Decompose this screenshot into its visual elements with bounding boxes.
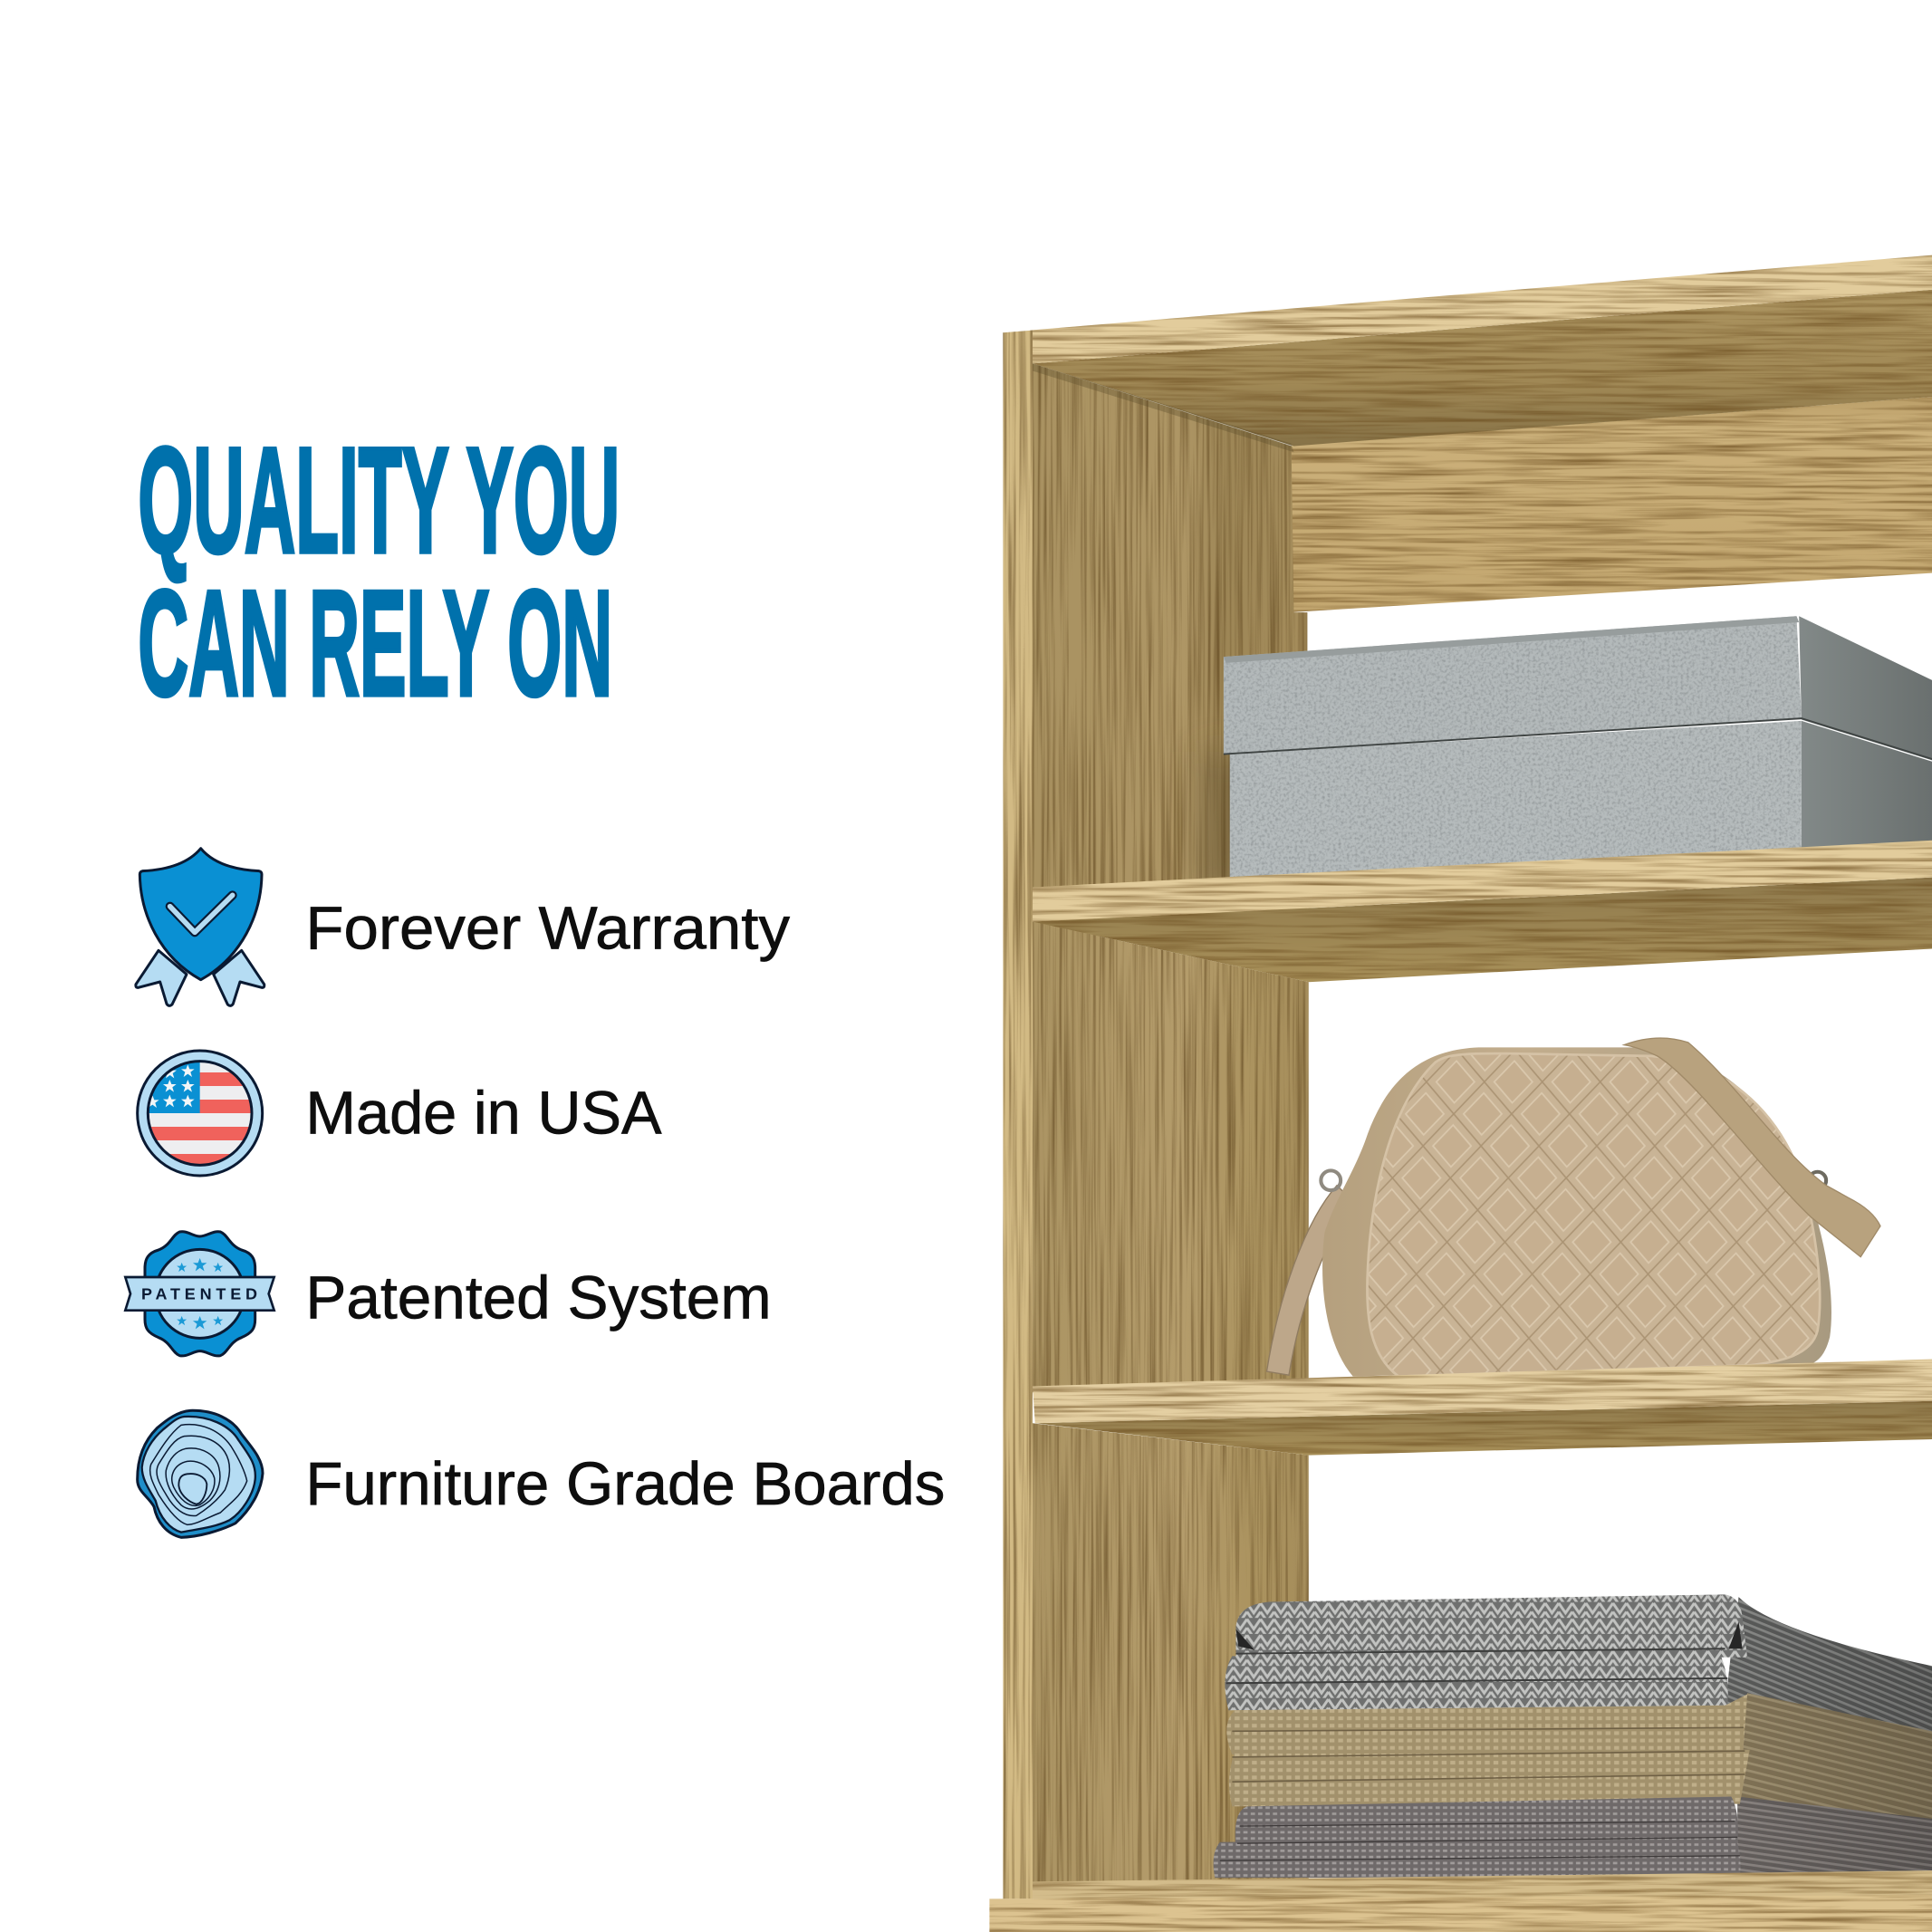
top board front edge [1030, 255, 1932, 363]
shelf one front edge [1033, 841, 1932, 922]
folded towels [1214, 1594, 1932, 1878]
shelving unit [989, 255, 1932, 1932]
label: furniture grade boards: Furniture Grade Boards [305, 1451, 945, 1518]
lower side panel [1033, 1423, 1309, 1885]
label: forever warranty: Forever Warranty [305, 896, 791, 963]
grey box [1224, 616, 1932, 879]
handbag [1266, 1038, 1880, 1377]
bottom board [1033, 1870, 1932, 1898]
shelf two front edge [1033, 1360, 1932, 1423]
soft shadow near upper corner [1033, 363, 1293, 452]
icon: american flag circle [138, 1051, 263, 1176]
label: patented system: Patented System [305, 1265, 772, 1332]
feature list [125, 849, 945, 1537]
label: made in usa: Made in USA [305, 1081, 662, 1148]
base front edge [989, 1895, 1932, 1932]
infographic canvas: QUALITY YOU [138, 417, 620, 584]
top board underside [1033, 290, 1932, 446]
shelf one underside [1033, 878, 1932, 982]
middle side panel [1033, 922, 1309, 1392]
infographic canvas: CAN RELY ON [138, 560, 612, 727]
icon: tree rings [138, 1410, 263, 1537]
icon: patented badge [125, 1232, 274, 1356]
title [138, 417, 620, 727]
shadow behind box [1201, 752, 1251, 893]
upper side panel [1033, 363, 1307, 937]
back panel [1289, 397, 1932, 612]
icon: patented badge: PATENTED [141, 1285, 257, 1303]
icon: shield with check and ribbons [136, 849, 264, 1005]
shelf two underside [1035, 1401, 1932, 1456]
left post [1003, 331, 1033, 1898]
